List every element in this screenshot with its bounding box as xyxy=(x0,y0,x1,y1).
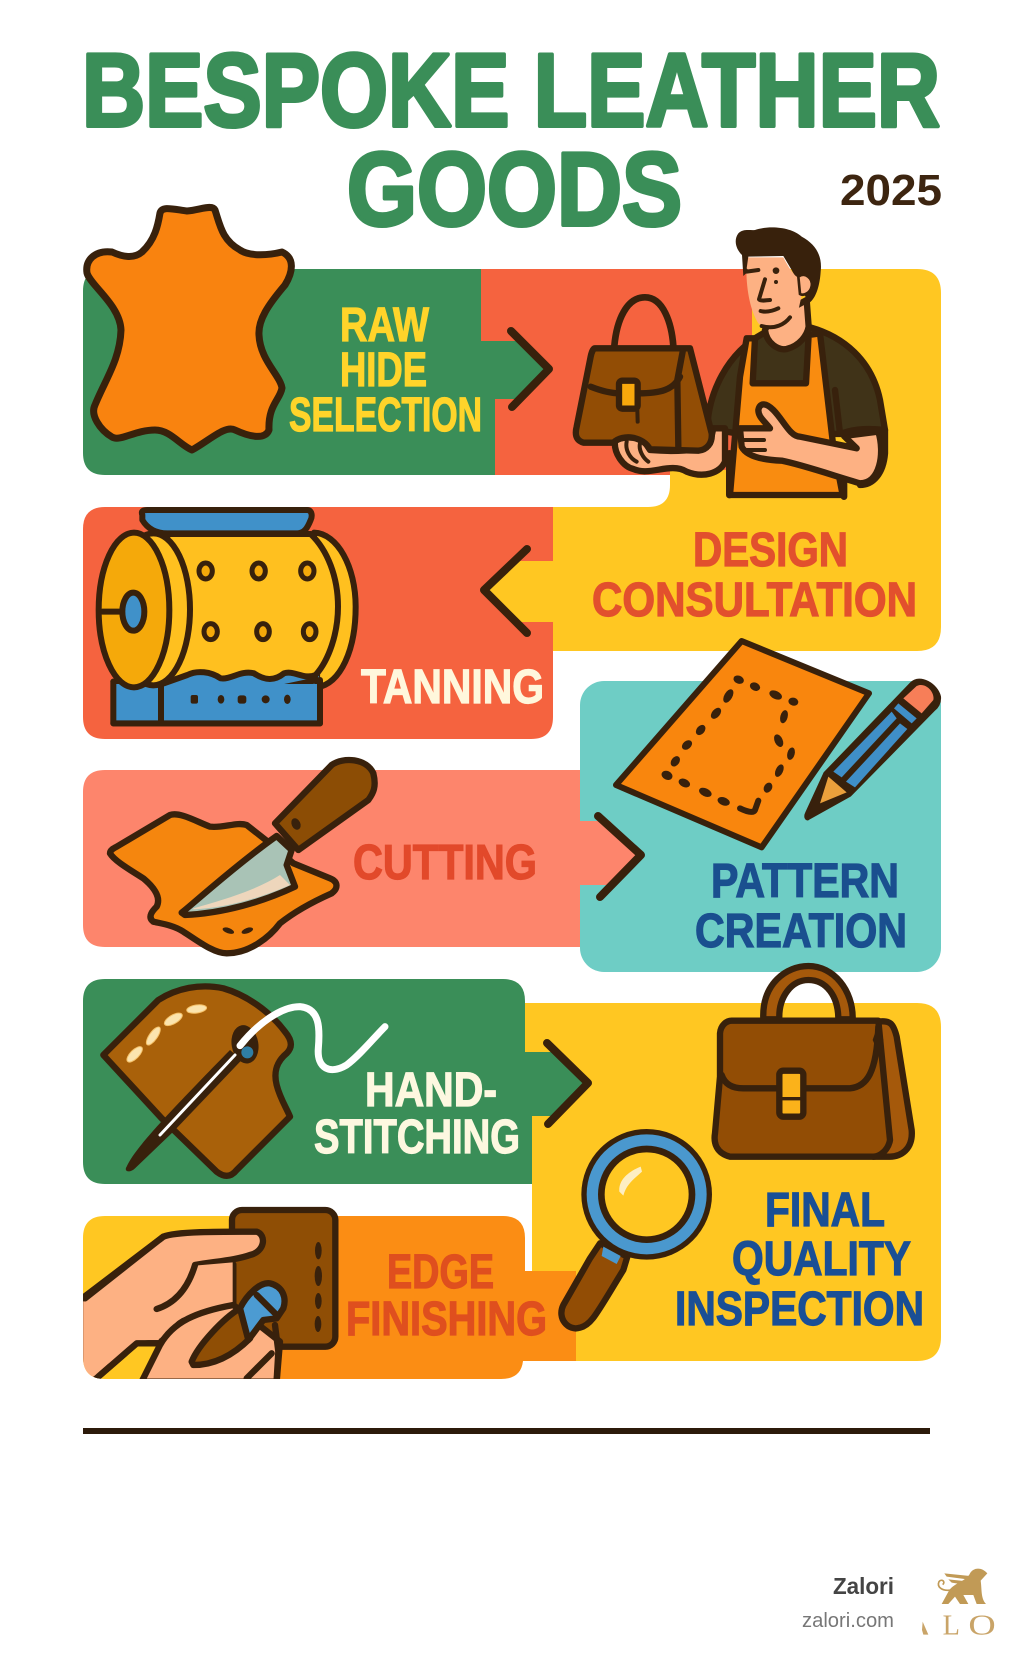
green arrow panel xyxy=(83,269,549,475)
bag body xyxy=(576,348,712,451)
title xyxy=(82,33,940,248)
arrow chevron xyxy=(511,331,549,407)
magnifier lens xyxy=(581,1129,712,1260)
year label: 2025 xyxy=(840,166,942,215)
green panel with arrow xyxy=(83,979,584,1184)
red connector block xyxy=(481,269,752,475)
pencil xyxy=(806,680,939,819)
label: edge finishing xyxy=(346,1246,547,1346)
yellow panel xyxy=(525,1003,941,1361)
label: final quality inspection xyxy=(675,1184,924,1336)
divider line xyxy=(83,1428,930,1434)
yellow left panel xyxy=(83,1216,360,1379)
label: raw hide selection: RAW xyxy=(340,299,430,352)
ear xyxy=(798,275,812,295)
arrow chevron xyxy=(598,816,641,897)
wordmark fragment: O xyxy=(968,1611,996,1642)
leather sheet xyxy=(616,641,869,847)
label: hand-stitching xyxy=(314,1064,520,1164)
bag clasp xyxy=(779,1071,803,1117)
bag clasp xyxy=(619,381,638,409)
apron lower edges xyxy=(729,453,844,497)
label: raw hide selection: SELECTION xyxy=(289,389,482,442)
footer brand text: zalori.com xyxy=(802,1610,894,1632)
label: design consultation: CONSULTATION xyxy=(592,574,917,627)
dashed pattern outline xyxy=(661,675,798,806)
burnishing tool xyxy=(192,1308,250,1365)
label: raw hide selection: HIDE xyxy=(340,344,427,397)
apron xyxy=(730,333,843,495)
panel: pattern creation xyxy=(580,681,941,972)
left arm holding bag xyxy=(615,428,725,475)
bag body xyxy=(715,1021,890,1157)
wordmark fragment xyxy=(922,1611,996,1642)
neck xyxy=(765,300,809,349)
magnifier handle xyxy=(561,1243,627,1328)
label: raw hide selection xyxy=(289,299,482,442)
bag handle xyxy=(614,297,673,346)
label: design consultation xyxy=(592,524,917,627)
panel: final quality inspection xyxy=(525,1003,941,1361)
face xyxy=(746,257,810,328)
footer brand text: Zalori xyxy=(833,1573,894,1599)
label: cutting: CUTTING xyxy=(353,836,537,890)
panel: edge finishing xyxy=(80,1210,576,1392)
icon: knife cutting leather xyxy=(110,760,375,953)
lion mark xyxy=(938,1569,987,1604)
hair xyxy=(736,227,821,303)
icons: bag and magnifier xyxy=(561,966,912,1328)
bag handle xyxy=(763,966,853,1019)
label: hand-stitching: HAND- xyxy=(365,1064,497,1117)
label: final quality inspection: QUALITY xyxy=(732,1233,911,1286)
label: final quality inspection: FINAL xyxy=(765,1184,885,1237)
icon: tanning drum xyxy=(99,510,356,723)
right arm and hand xyxy=(740,404,881,483)
label: edge finishing: EDGE xyxy=(387,1246,494,1299)
label: final quality inspection: INSPECTION xyxy=(675,1283,924,1336)
panel: design consultation background xyxy=(553,269,941,651)
arrow chevron xyxy=(547,1043,588,1124)
panel: cutting xyxy=(83,760,641,953)
facial features xyxy=(747,270,790,327)
footer logo xyxy=(922,1569,996,1642)
footer brand text xyxy=(802,1573,894,1632)
label: pattern creation: CREATION xyxy=(695,905,907,958)
title: GOODS xyxy=(347,132,682,248)
panel: raw hide selection xyxy=(83,207,752,475)
label: edge finishing: FINISHING xyxy=(346,1293,547,1346)
wallet xyxy=(232,1210,335,1347)
arrow: design consultation to tanning xyxy=(484,549,553,633)
orange right panel xyxy=(280,1216,576,1379)
palm xyxy=(80,1232,263,1392)
icon: hand and wallet xyxy=(80,1210,335,1392)
icon: craftsman with bag xyxy=(576,227,885,497)
panel: tanning xyxy=(83,507,553,739)
shirt xyxy=(707,327,885,434)
icon: leather and needle xyxy=(103,986,385,1176)
red panel xyxy=(83,507,553,739)
label: tanning: TANNING xyxy=(361,661,544,714)
label: pattern creation: PATTERN xyxy=(711,855,899,908)
label: pattern creation xyxy=(695,855,907,958)
icon: leather pattern and pencil xyxy=(616,641,939,847)
salmon panel with arrow xyxy=(83,770,638,947)
teal panel xyxy=(580,681,941,972)
icon: raw hide xyxy=(87,207,291,450)
bag side panel xyxy=(873,1021,912,1157)
panel: hand-stitching xyxy=(83,979,588,1184)
label: hand-stitching: STITCHING xyxy=(314,1111,520,1164)
lower finger xyxy=(142,1305,280,1382)
wordmark fragment: L xyxy=(943,1611,960,1642)
label: design consultation: DESIGN xyxy=(693,524,848,577)
